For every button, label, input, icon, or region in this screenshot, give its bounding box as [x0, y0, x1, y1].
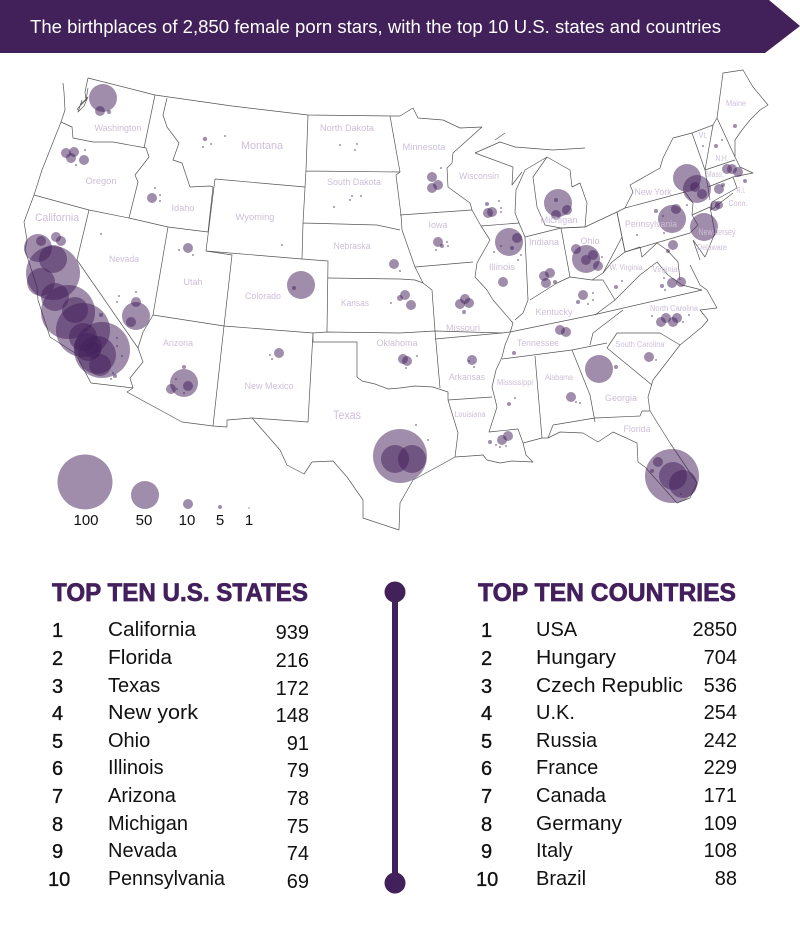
title banner — [0, 0, 800, 53]
state name labels: New Mexico — [244, 381, 294, 392]
table: top ten U.S. states: 78 — [287, 788, 309, 810]
state name labels: Indiana — [529, 237, 560, 248]
table: top ten U.S. states — [48, 619, 309, 893]
state name labels: N.H. — [716, 154, 728, 163]
table: top ten countries: 9 — [481, 841, 492, 863]
table: top ten U.S. states: 5 — [52, 731, 63, 753]
table: top ten countries: 108 — [704, 840, 737, 862]
state name labels: North Dakota — [320, 123, 375, 134]
table: top ten U.S. states: 10 — [48, 869, 70, 891]
state name labels: Pennsylvania — [625, 219, 678, 230]
state name labels: Mass. — [706, 170, 724, 179]
state name labels: R.I. — [736, 186, 746, 195]
table: top ten countries: 1 — [481, 620, 492, 642]
table: top ten U.S. states: New york — [108, 702, 199, 724]
table: top ten U.S. states: Florida — [108, 647, 173, 669]
size legend — [58, 454, 253, 529]
table: top ten U.S. states: 148 — [276, 705, 309, 727]
table: top ten countries: Germany — [536, 813, 622, 835]
table: top ten countries: Brazil — [536, 868, 586, 890]
state name labels: Washington — [94, 123, 142, 134]
state name labels: Oregon — [86, 176, 116, 187]
table: top ten U.S. states: Pennsylvania — [108, 868, 226, 890]
bubble layer: birthplaces — [24, 84, 747, 503]
state borders — [24, 70, 768, 530]
state name labels: Alabama — [545, 373, 573, 382]
center connector line — [384, 582, 406, 894]
state name labels: Wisconsin — [459, 171, 499, 182]
table: top ten countries: Czech Republic — [536, 675, 683, 697]
table: top ten U.S. states: 8 — [52, 814, 63, 836]
table: top ten countries: Hungary — [536, 647, 616, 669]
state name labels: Texas — [333, 408, 361, 422]
state name labels: Wyoming — [236, 212, 274, 223]
state name labels: North Carolina — [650, 304, 699, 313]
table: top ten countries: U.K. — [536, 702, 575, 724]
state name labels: Ohio — [580, 236, 600, 247]
table: top ten countries: 4 — [481, 703, 492, 725]
table: top ten U.S. states: Arizona — [108, 785, 177, 807]
heading: top ten U.S. states: TOP TEN U.S. STATES — [52, 579, 308, 607]
table: top ten countries: Russia — [536, 730, 598, 752]
state name labels: Idaho — [172, 203, 194, 214]
table: top ten countries: 5 — [481, 731, 492, 753]
table: top ten U.S. states: 2 — [52, 648, 63, 670]
table: top ten U.S. states: California — [108, 619, 197, 641]
table: top ten countries: 7 — [481, 786, 492, 808]
state name labels: Mississippi — [497, 378, 533, 387]
table: top ten countries: France — [536, 757, 598, 779]
table: top ten U.S. states: 4 — [52, 703, 63, 725]
table: top ten countries: 3 — [481, 676, 492, 698]
state name labels: New Jersey — [698, 227, 736, 238]
table: top ten U.S. states: Michigan — [108, 813, 188, 835]
table: top ten U.S. states: Ohio — [108, 730, 150, 752]
state name labels: Oklahoma — [376, 338, 418, 349]
state name labels: Kansas — [341, 298, 369, 309]
state name labels: Arizona — [163, 338, 194, 349]
table: top ten countries: 109 — [704, 813, 737, 835]
table: top ten U.S. states: 216 — [276, 650, 309, 672]
state name labels: South Dakota — [327, 177, 382, 188]
table: top ten countries — [476, 619, 737, 891]
state name labels: W. Virginia — [610, 263, 643, 272]
table: top ten U.S. states: Texas — [108, 675, 160, 697]
state name labels: Vt. — [698, 131, 708, 140]
table: top ten countries: USA — [536, 619, 578, 641]
state name labels: Virginia — [652, 265, 678, 274]
table: top ten countries: 10 — [476, 869, 498, 891]
state name labels: New York — [634, 187, 672, 198]
table: top ten countries: Canada — [536, 785, 607, 807]
state name labels: Montana — [241, 140, 284, 152]
table: top ten U.S. states: 74 — [287, 843, 309, 865]
state name labels: Kentucky — [536, 307, 573, 318]
table: top ten countries: 242 — [704, 730, 737, 752]
state name labels: South Carolina — [616, 340, 665, 349]
state name labels: Minnesota — [402, 142, 446, 153]
state name labels: Missouri — [446, 323, 480, 334]
size legend: 100 — [73, 512, 99, 529]
state name labels: Iowa — [428, 220, 448, 231]
title banner: The birthplaces of 2,850 female porn stars, with the top 10 U.S. states and countries — [30, 16, 721, 37]
size legend: 10 — [179, 512, 195, 529]
table: top ten countries: 2850 — [692, 619, 737, 641]
state name labels: California — [35, 212, 80, 224]
table: top ten U.S. states: 79 — [287, 760, 309, 782]
table: top ten U.S. states: Nevada — [108, 840, 178, 862]
state name labels: Michigan — [540, 215, 578, 226]
state name labels: Maine — [726, 99, 746, 108]
state name labels: Tennessee — [517, 338, 559, 349]
table: top ten countries: 704 — [704, 647, 737, 669]
table: top ten countries: 8 — [481, 814, 492, 836]
table: top ten U.S. states: Illinois — [108, 757, 164, 779]
table: top ten U.S. states: 3 — [52, 676, 63, 698]
table: top ten countries: 171 — [704, 785, 737, 807]
table: top ten U.S. states: 9 — [52, 841, 63, 863]
table: top ten U.S. states: 75 — [287, 816, 309, 838]
size legend: 1 — [245, 512, 253, 529]
state name labels: Nebraska — [334, 241, 371, 252]
table: top ten U.S. states: 91 — [287, 733, 309, 755]
table: top ten countries: 229 — [704, 757, 737, 779]
state name labels — [35, 99, 748, 435]
state name labels: Arkansas — [449, 372, 485, 383]
size legend: 50 — [136, 512, 152, 529]
state name labels: Florida — [624, 424, 651, 435]
state name labels: Utah — [184, 277, 202, 288]
state name labels: Conn. — [728, 199, 748, 208]
table: top ten countries: 6 — [481, 758, 492, 780]
table: top ten U.S. states: 939 — [276, 622, 309, 644]
table: top ten countries: 2 — [481, 648, 492, 670]
state name labels: Colorado — [245, 291, 281, 302]
state name labels: Georgia — [605, 393, 638, 404]
table: top ten countries: 88 — [715, 868, 737, 890]
table: top ten U.S. states: 1 — [52, 620, 63, 642]
state name labels: Illinois — [489, 262, 515, 273]
table: top ten countries: 536 — [704, 675, 737, 697]
heading: top ten countries: TOP TEN COUNTRIES — [478, 579, 736, 607]
map of the United States — [24, 70, 768, 530]
table: top ten U.S. states: 69 — [287, 871, 309, 893]
state name labels: Louisiana — [454, 410, 486, 419]
table: top ten U.S. states: 6 — [52, 758, 63, 780]
state name labels: Delaware — [697, 243, 727, 252]
table: top ten countries: 254 — [704, 702, 737, 724]
state name labels: Nevada — [109, 254, 140, 265]
table: top ten U.S. states: 7 — [52, 786, 63, 808]
table: top ten countries: Italy — [536, 840, 573, 862]
table: top ten U.S. states: 172 — [276, 678, 309, 700]
size legend: 5 — [216, 512, 224, 529]
